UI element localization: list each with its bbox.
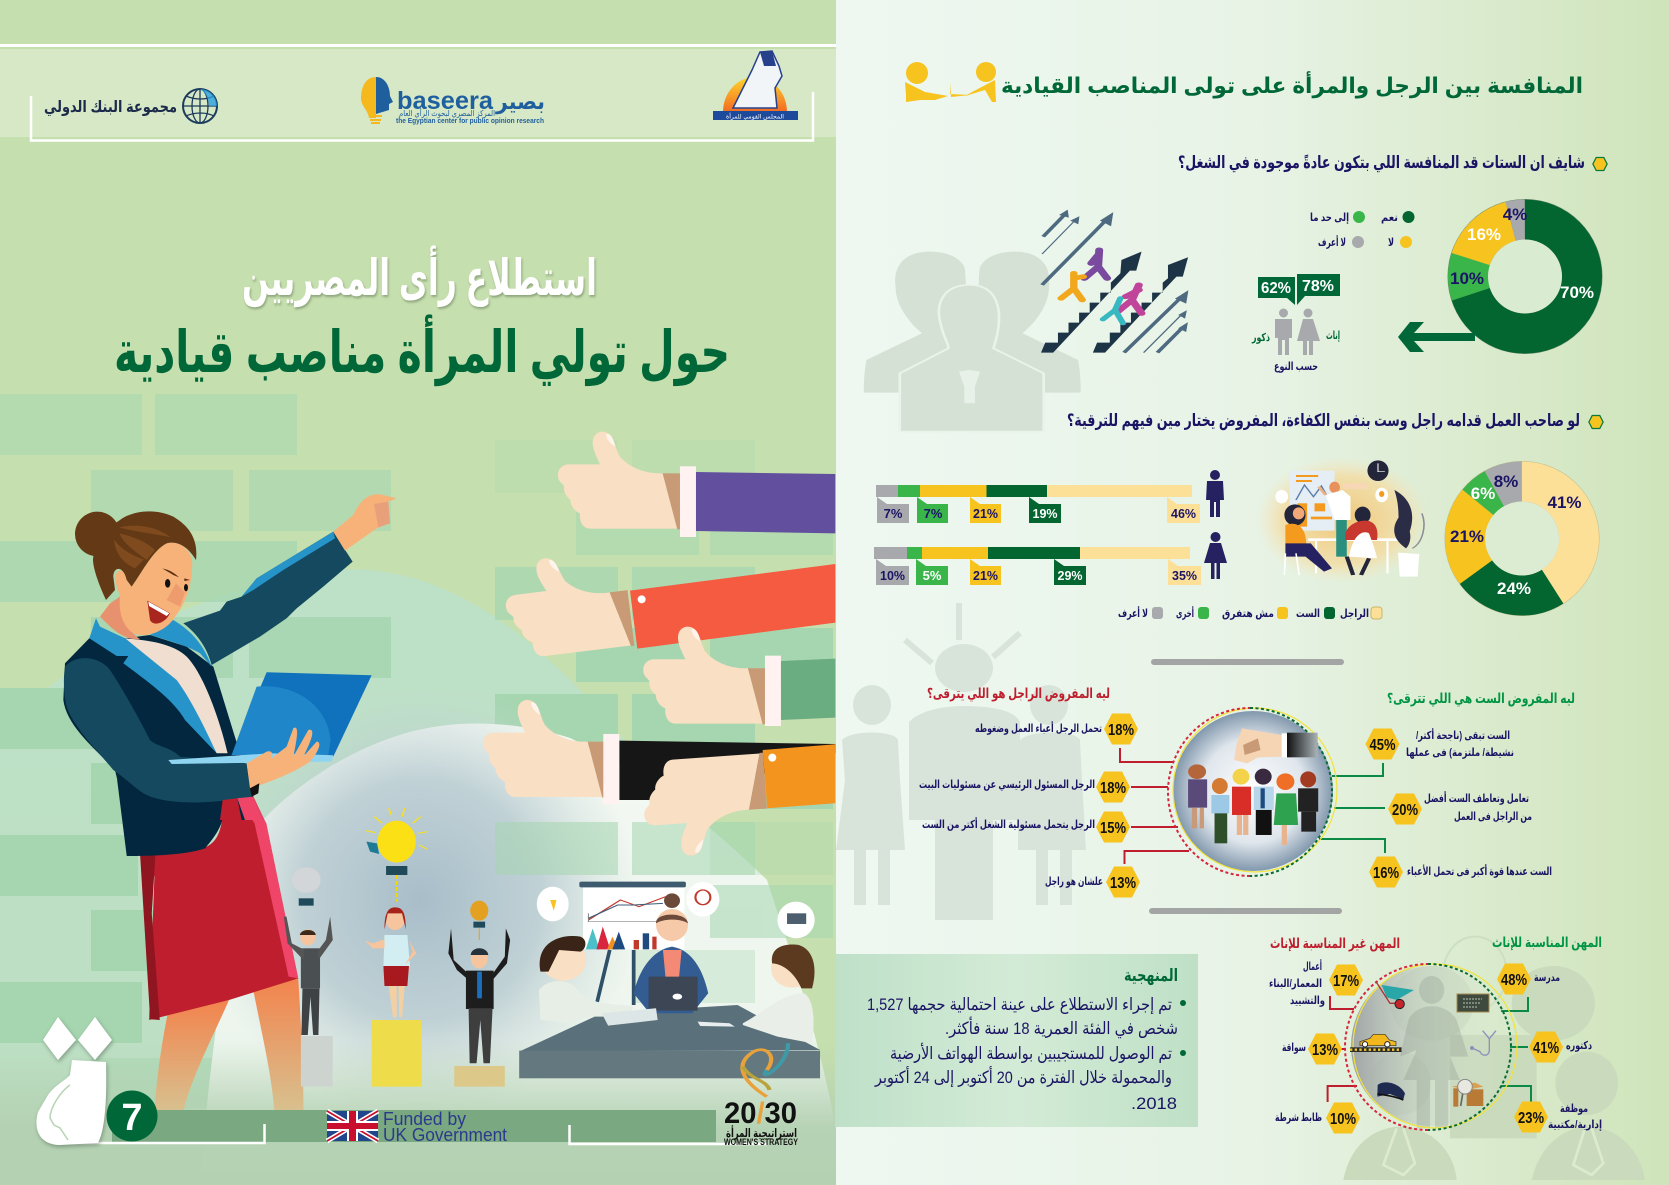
label 35%: [1168, 559, 1201, 585]
reason 13% he is a man: علشان هو راجل: [1045, 876, 1103, 888]
job 23% admin: موظفة: [1560, 1103, 1588, 1115]
label 10%: [876, 559, 909, 585]
connectors: professions: [1328, 996, 1531, 1102]
reason 45%: الست تبقى (ناجحة أكتر/: [1416, 728, 1510, 742]
reason 16%: [1369, 856, 1552, 888]
reason 16%: الست عندها قوة أكبر فى تحمل الأعباء: [1407, 864, 1552, 878]
icon: desk: [1452, 1079, 1483, 1107]
job 41% doctor: 41%: [1533, 1040, 1559, 1057]
job 17% construction: والتشييد: [1290, 995, 1325, 1007]
job 10% police: [1275, 1102, 1360, 1134]
background mound: [0, 569, 836, 1185]
brick wall pattern: [0, 394, 833, 1108]
people group: [1188, 764, 1318, 845]
hand: green sleeve: [643, 627, 835, 726]
label 5%: 5%: [923, 568, 942, 583]
label 21%: 21%: [973, 506, 998, 521]
woman in white top: [365, 907, 416, 1017]
logo: world bank group: [44, 89, 217, 123]
icon: chalkboard: [1457, 994, 1489, 1012]
reason 45%: [1366, 728, 1514, 760]
reason 20%: [1388, 791, 1532, 824]
logo: world bank group: مجموعة البنك الدولي: [44, 99, 177, 117]
reason 18% home: الرجل المسئول الرئيسي عن مسئوليات البيت: [919, 779, 1095, 791]
seated person in red: [1345, 507, 1377, 575]
logo: 2030 swirl: [742, 1043, 788, 1097]
donut chart: who gets promoted: 24%: [1497, 579, 1531, 598]
seated woman: [1284, 504, 1332, 575]
label 7% green: [917, 497, 948, 523]
illustration: office team: [1255, 457, 1430, 583]
gender breakdown of yes: إناث: [1326, 330, 1340, 342]
issue number 7: [106, 1090, 158, 1142]
gender breakdown of yes: ذكور: [1251, 332, 1270, 344]
label 10%: 10%: [880, 568, 905, 583]
panel: cover background: [0, 0, 836, 1185]
bulb: yellow: [366, 808, 428, 902]
donut chart: competition: 10%: [1450, 269, 1484, 288]
icon: man and woman at desks: [905, 62, 996, 102]
label 29%: [1054, 559, 1086, 585]
heading: why woman: ليه المفروض الست هي اللي تترقى؟: [1387, 690, 1575, 707]
logo: women's strategy 2030: استراتيجية المرأة: [726, 1125, 797, 1140]
silhouettes: women group behind section one: [864, 252, 1081, 432]
legend: donut one: لا أعرف: [1318, 235, 1346, 249]
job 48% teacher: 48%: [1501, 972, 1527, 989]
header band with logos: [0, 44, 836, 140]
methodology heading: المنهجية: [1124, 966, 1178, 986]
job 48% teacher: مدرسة: [1534, 972, 1560, 984]
donut chart: competition: 16%: [1467, 225, 1501, 244]
bottom fade: [0, 1040, 836, 1185]
logo: baseera: المركز المصري لبحوث الرأي العام: [399, 108, 495, 118]
heading: competition title: [905, 62, 1583, 102]
donut chart: competition: 70%: [1560, 283, 1594, 302]
funded by text: Funded by: [383, 1109, 466, 1129]
heading: suitable jobs: المهن المناسبة للإناث: [1492, 934, 1602, 951]
reason 18% home: 18%: [1100, 780, 1126, 797]
donut chart: who gets promoted: 41%: [1547, 493, 1582, 512]
skirt: [140, 790, 298, 1020]
reason 13% he is a man: 13%: [1110, 875, 1136, 892]
man at left of table: [539, 936, 658, 1026]
hand: red sleeve: [501, 549, 835, 661]
reason 20%: 20%: [1392, 802, 1418, 819]
icon: wheelbarrow: [1376, 982, 1414, 1009]
reason 18% burdens: تحمل الرجل أعباء العمل وضغوطه: [975, 721, 1102, 735]
legend: donut one: [1310, 211, 1414, 249]
icon: hand: [1234, 728, 1318, 763]
illustration: stairs with runners: [1041, 210, 1188, 353]
logo: baseera: the Egyptian center for public opinion research: [396, 116, 544, 125]
reason 15% work: 15%: [1100, 820, 1126, 837]
legend: promotion: [1118, 606, 1382, 620]
job 23% admin: [1514, 1102, 1602, 1132]
methodology text: 2018.: [1131, 1094, 1177, 1113]
logo: 7th bulletin mark: [36, 1017, 112, 1145]
label 21%: [970, 497, 1001, 523]
reason 18% burdens: [975, 714, 1138, 744]
label 46%: [1167, 497, 1200, 523]
label 21%: [970, 559, 1001, 585]
logo: baseera: [361, 77, 545, 125]
job 10% police: 10%: [1330, 1111, 1356, 1128]
panel: methodology: [835, 954, 1198, 1127]
legs: [154, 978, 304, 1110]
legend: promotion: الراجل: [1340, 608, 1369, 620]
logo: baseera: بصير: [495, 89, 545, 115]
methodology text: والمحمولة خلال الفترة من 20 أكتوبر إلى 24 أكتوبر: [874, 1066, 1172, 1087]
job 13% driver: سواقة: [1282, 1042, 1306, 1054]
silhouette: woman: [1400, 976, 1468, 1128]
panel: results page background: [836, 0, 1669, 1185]
logo: women's strategy 2030: 20/30: [724, 1097, 797, 1130]
title: حول تولي المرأة مناصب قيادية: [114, 314, 730, 387]
laptop: [168, 672, 372, 764]
logo: women's strategy 2030: [724, 1097, 798, 1147]
logo: women's strategy 2030: WOMEN'S STRATEGY: [724, 1137, 798, 1147]
illustration: small figures on pedestals and meeting: [284, 808, 820, 1097]
funded by text: [383, 1109, 507, 1145]
white mound: [200, 723, 836, 1185]
job 23% admin: إدارية/مكتبية: [1548, 1119, 1602, 1131]
donut chart: competition: 4%: [1503, 205, 1527, 224]
reason 16%: 16%: [1373, 865, 1399, 882]
donut chart: who gets promoted: 8%: [1494, 472, 1518, 491]
standing man: [1319, 482, 1350, 557]
legend: donut one: إلى حد ما: [1310, 212, 1349, 224]
stacked bar: men: [876, 485, 1200, 523]
silhouettes: people behind professions section: [1343, 937, 1645, 1180]
icon: stethoscope: [1471, 1031, 1496, 1055]
job 17% construction: المعمار/البناء: [1269, 978, 1322, 990]
job 41% doctor: دكتوره: [1566, 1040, 1592, 1052]
silhouettes: people behind reasons section: [836, 603, 1086, 920]
central circle: people and handshake: [1168, 708, 1337, 876]
hand: black sleeve: [483, 700, 835, 804]
jacket: [63, 635, 263, 820]
legend: promotion: أخرى: [1176, 606, 1194, 620]
job 10% police: ظابط شرطة: [1275, 1112, 1322, 1124]
heading: why man: ليه المفروض الراجل هو اللي يترقى؟: [927, 685, 1110, 702]
illustration: woman with laptop pointing: [63, 494, 397, 1110]
job 17% construction: [1269, 959, 1363, 1007]
bulb: orange: [470, 901, 488, 940]
callout: male 62%: 62%: [1261, 280, 1291, 297]
central circle: female professions: [1345, 964, 1517, 1130]
arrow: points to gender breakdown: [1398, 322, 1475, 352]
pedestals: [301, 1020, 505, 1087]
legend: donut one: لا: [1388, 237, 1394, 249]
methodology text: تم الوصول للمستجيبين بواسطة الهواتف الأرضية: [890, 1043, 1172, 1064]
methodology text: تم إجراء الاستطلاع على عينة احتمالية حجمها 1,527: [867, 995, 1172, 1015]
meeting table: [519, 1005, 820, 1078]
label 21%: 21%: [973, 568, 998, 583]
thought bubbles: [537, 882, 815, 938]
icon: police cap: [1377, 1082, 1405, 1100]
reason 20%: من الراجل فى العمل: [1454, 811, 1532, 823]
job 23% admin: 23%: [1518, 1110, 1544, 1127]
label 7% grey: [877, 497, 909, 523]
gender breakdown of yes: حسب النوع: [1274, 361, 1318, 373]
label 7% grey: 7%: [884, 506, 903, 521]
reason 45%: نشيطة/ ملتزمة) فى عملها: [1406, 747, 1514, 759]
donut chart: who gets promoted: [1444, 461, 1600, 616]
reason 15% work: الرجل يتحمل مسئولية الشغل أكتر من الست: [922, 817, 1095, 831]
reason 18% burdens: 18%: [1108, 722, 1134, 739]
icon: man: [1206, 470, 1224, 517]
job 17% construction: أعمال: [1303, 959, 1322, 973]
man with mustache: [284, 917, 333, 1035]
job 13% driver: 13%: [1312, 1042, 1338, 1059]
woman at laptop: [634, 893, 708, 1013]
heading: unsuitable jobs: المهن غير المناسبة للإناث: [1270, 935, 1400, 952]
icon: taxi: [1350, 1034, 1402, 1052]
icon: UK flag: [327, 1111, 378, 1141]
suitable jobs: [1497, 964, 1602, 1132]
holding hand: [247, 728, 319, 788]
man with blue tie: [448, 928, 510, 1063]
footer bar and brackets: [36, 1017, 798, 1147]
icon: woman: [1204, 532, 1227, 579]
presentation board: [579, 882, 686, 1005]
reason 45%: 45%: [1370, 737, 1396, 754]
raised arm: [183, 494, 397, 665]
funded by text: UK Government: [383, 1125, 507, 1145]
hand: thumb down, orange sleeve: [641, 744, 835, 859]
label 7% green: 7%: [924, 506, 943, 521]
legend: promotion: الست: [1296, 608, 1320, 620]
label 35%: 35%: [1172, 568, 1197, 583]
legend: promotion: لا أعرف: [1118, 606, 1148, 620]
methodology text: [867, 995, 1178, 1113]
head: [75, 511, 196, 639]
title: [114, 245, 730, 387]
title text: المنافسة بين الرجل والمرأة على تولى المناصب القيادية: [1001, 70, 1583, 99]
reasons for woman: [1366, 728, 1552, 888]
illustration: thumbs hands with sleeves: [483, 432, 835, 859]
logo: national council for women: [713, 51, 798, 120]
gender breakdown of yes: [1251, 274, 1340, 373]
title: استطلاع رأى المصريين: [242, 245, 597, 308]
label 5%: [916, 559, 948, 585]
icon: woman: [1297, 308, 1320, 355]
label 46%: 46%: [1171, 506, 1196, 521]
job 17% construction: 17%: [1333, 973, 1359, 990]
job 41% doctor: [1529, 1032, 1592, 1062]
label 19%: 19%: [1032, 506, 1058, 521]
woman at right of table: [698, 944, 815, 1043]
bullet markers: [1180, 1000, 1186, 1056]
reasons for man: [919, 714, 1140, 898]
hand: purple sleeve: [558, 432, 835, 537]
legend: promotion: مش هتفرق: [1222, 608, 1274, 620]
reason 13% he is a man: [1045, 866, 1140, 898]
label 29%: 29%: [1058, 568, 1083, 583]
job 48% teacher: [1497, 964, 1560, 994]
legend: donut one: نعم: [1381, 212, 1398, 224]
plant: [1394, 490, 1424, 577]
callout: female 78%: 78%: [1302, 278, 1334, 295]
methodology text: شخص في الفئة العمرية 18 سنة فأكثر.: [945, 1016, 1178, 1039]
donut chart: competition: [1448, 199, 1602, 354]
runners: [1061, 250, 1142, 323]
issue number 7: 7: [121, 1097, 143, 1139]
reason 20%: تعامل وتعاطف الست أفضل: [1424, 791, 1529, 805]
donut chart: who gets promoted: 6%: [1471, 484, 1495, 503]
donut chart: who gets promoted: 21%: [1450, 527, 1484, 546]
reason 18% home: [919, 772, 1130, 802]
icon: man: [1275, 308, 1292, 355]
label 19%: [1029, 497, 1061, 523]
unsuitable jobs: [1269, 959, 1363, 1134]
logo: baseera: baseera: [397, 87, 494, 115]
bulb: grey: [292, 867, 321, 906]
stacked bar: women: [874, 547, 1201, 585]
connectors: reasons: [1120, 748, 1385, 864]
logo: national council for women: المجلس القومي للمرأة: [726, 112, 784, 120]
job 13% driver: [1282, 1034, 1342, 1064]
reason 15% work: [922, 812, 1130, 842]
